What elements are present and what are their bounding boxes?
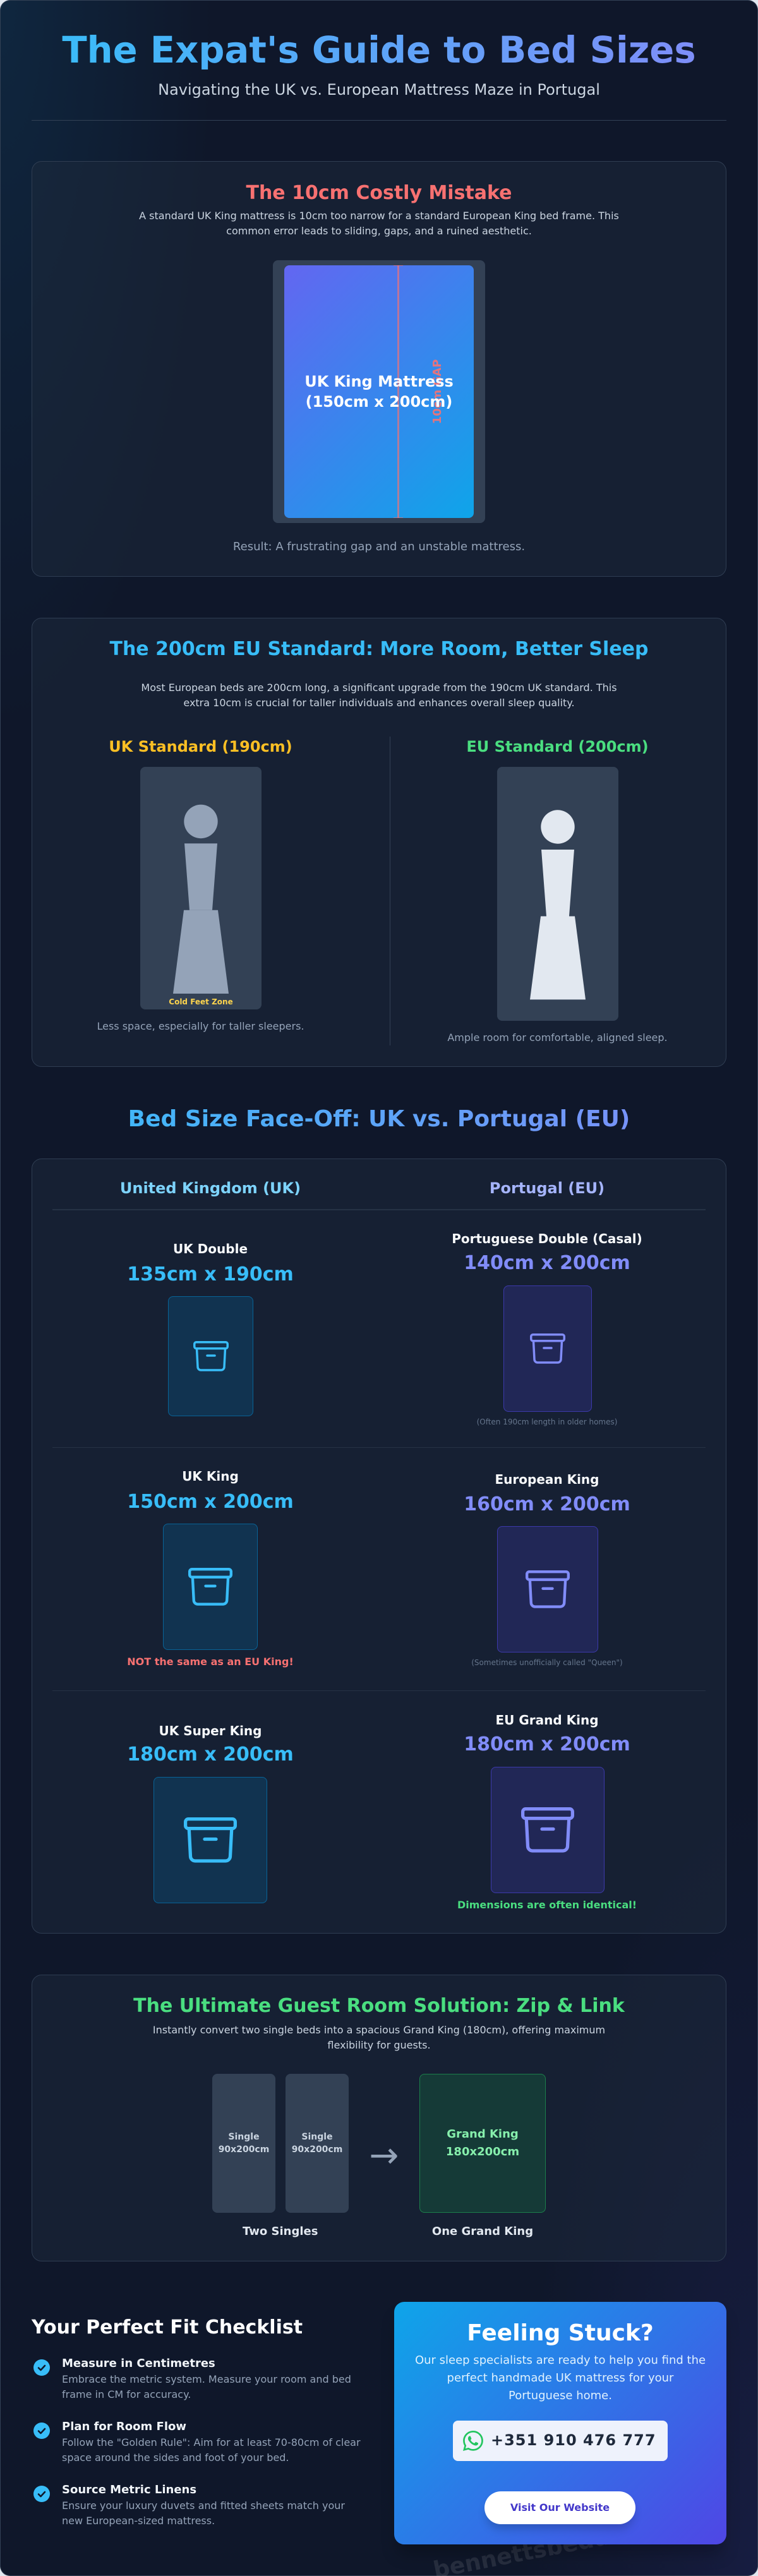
panel: zip and link <box>32 1975 726 2261</box>
icon: storage box <box>184 1817 237 1863</box>
text: EU standard explanation: extra 10cm is crucial for taller individuals and enhances overall sleep quality. <box>183 697 575 709</box>
bed label: grand king <box>446 2128 519 2158</box>
panel: call to action <box>394 2302 726 2544</box>
item text <box>62 2373 351 2400</box>
bed label: grand king: Grand King <box>447 2128 519 2141</box>
item text: Follow the "Golden Rule": Aim for at least 70-80cm of clear <box>62 2436 361 2448</box>
bed box: UK Super King <box>153 1777 267 1903</box>
size: EU Grand King: 180cm x 200cm <box>464 1733 630 1755</box>
heading: checklist: Your Perfect Fit Checklist <box>32 2316 303 2338</box>
phone box <box>453 2421 668 2461</box>
text: costly mistake explanation: common error leads to sliding, gaps, and a ruined aesthetic. <box>226 225 532 237</box>
panel: perfect fit checklist <box>32 2316 361 2527</box>
label: cold feet zone: Cold Feet Zone <box>169 997 233 1006</box>
item text <box>62 2436 361 2464</box>
phone number: +351 910 476 777 <box>491 2431 656 2449</box>
column head: UK: United Kingdom (UK) <box>120 1179 301 1197</box>
button: visit website <box>484 2491 635 2524</box>
checklist item: measure <box>33 2357 351 2400</box>
text: call to action: perfect handmade UK mattress for your <box>447 2371 673 2385</box>
label: EU Grand King: EU Grand King <box>495 1712 599 1728</box>
label: two singles: Two Singles <box>243 2225 318 2238</box>
mattress <box>284 265 474 518</box>
item title: Source Metric Linens <box>62 2483 196 2496</box>
label: UK Double: UK Double <box>173 1241 248 1256</box>
bed box: EU Grand King <box>490 1767 604 1893</box>
text: zip and link explanation: flexibility for guests. <box>327 2039 431 2051</box>
text: call to action <box>415 2354 706 2402</box>
diagram: UK bed with sleeper <box>140 767 262 1009</box>
bed: single two: Single <box>301 2132 333 2142</box>
arrow: → <box>370 2135 399 2176</box>
text: costly mistake explanation <box>139 210 619 237</box>
text: call to action: Portuguese home. <box>508 2389 612 2402</box>
size: UK Super King: 180cm x 200cm <box>127 1743 294 1766</box>
label: Portuguese Double: Portuguese Double (Casal) <box>452 1231 642 1246</box>
note: UK King warning: NOT the same as an EU King! <box>127 1656 294 1668</box>
size: UK King: 150cm x 200cm <box>127 1491 294 1513</box>
note: European King: (Sometimes unofficially called "Queen") <box>471 1658 623 1667</box>
item text <box>62 2500 345 2527</box>
heading: costly mistake: The 10cm Costly Mistake <box>246 182 512 204</box>
label: UK Super King: UK Super King <box>159 1723 262 1738</box>
mattress label: UK King Mattress <box>304 373 454 390</box>
bed: single two <box>286 2074 349 2213</box>
icon: storage box <box>193 1341 229 1371</box>
heading: EU standard column: EU Standard (200cm) <box>466 738 649 755</box>
size: European King: 160cm x 200cm <box>464 1493 630 1515</box>
result caption: Result: A frustrating gap and an unstable mattress. <box>233 540 525 553</box>
bed: single one <box>212 2074 275 2213</box>
item title: Plan for Room Flow <box>62 2420 186 2433</box>
label: one grand king: One Grand King <box>432 2225 533 2238</box>
label: UK King: UK King <box>182 1469 239 1484</box>
button label: Visit Our Website <box>510 2501 610 2513</box>
item text: Ensure your luxury duvets and fitted sheets match your <box>62 2500 345 2512</box>
bed: grand king <box>419 2074 546 2213</box>
bed box: UK King <box>163 1524 258 1650</box>
bed label: grand king: 180x200cm <box>446 2145 519 2158</box>
title: The Expat's Guide to Bed Sizes <box>62 29 696 71</box>
gap label: 10cm GAP <box>431 359 444 424</box>
bed box: European King <box>496 1526 598 1652</box>
text: call to action: Our sleep specialists are ready to help you find the <box>415 2354 706 2367</box>
panel: the 200cm EU standard <box>32 618 726 1067</box>
text: EU standard explanation <box>141 682 617 709</box>
caption: EU: Ample room for comfortable, aligned sleep. <box>447 1032 668 1044</box>
bed: single one: 90x200cm <box>219 2145 269 2155</box>
note: Portuguese Double: (Often 190cm length in older homes) <box>477 1417 617 1426</box>
gap line <box>397 265 399 518</box>
panel: comparison table <box>32 1159 726 1934</box>
note: EU Grand King: Dimensions are often identical! <box>457 1899 637 1911</box>
icon: whatsapp <box>463 2431 483 2451</box>
bed: single two: 90x200cm <box>292 2145 342 2155</box>
text: zip and link explanation <box>153 2024 605 2051</box>
column head: Portugal: Portugal (EU) <box>490 1179 605 1197</box>
size: Portuguese Double: 140cm x 200cm <box>464 1252 630 1274</box>
item title: Measure in Centimetres <box>62 2357 215 2370</box>
item text: new European-sized mattress. <box>62 2515 215 2527</box>
icon: storage box <box>521 1807 574 1853</box>
panel: the 10cm costly mistake <box>32 161 726 577</box>
mattress label <box>304 373 454 411</box>
bed box: UK Double <box>168 1296 253 1416</box>
mattress label: (150cm x 200cm) <box>306 393 452 411</box>
icon: check <box>33 2486 50 2502</box>
item text: frame in CM for accuracy. <box>62 2388 191 2400</box>
text: zip and link explanation: Instantly convert two single beds into a spacious Grand King (180cm), offering maximum <box>153 2024 605 2036</box>
icon: storage box <box>188 1568 232 1606</box>
checklist item: room flow <box>33 2420 361 2464</box>
item text: Embrace the metric system. Measure your room and bed <box>62 2373 351 2385</box>
diagram: EU bed with sleeper <box>496 767 618 1021</box>
checklist item: linens <box>33 2483 345 2527</box>
subtitle: Navigating the UK vs. European Mattress Maze in Portugal <box>158 81 600 99</box>
bed: single one: Single <box>228 2132 260 2142</box>
heading: EU standard: The 200cm EU Standard: More Room, Better Sleep <box>109 638 648 660</box>
icon: storage box <box>530 1333 565 1364</box>
bed box: Portuguese Double <box>503 1285 591 1412</box>
icon: storage box <box>526 1570 570 1608</box>
caption: UK: Less space, especially for taller sleepers. <box>97 1020 304 1032</box>
size: UK Double: 135cm x 190cm <box>127 1263 294 1285</box>
figure: sleeper EU <box>530 810 586 999</box>
icon: check <box>33 2423 50 2439</box>
icon: check <box>33 2359 50 2376</box>
heading: UK standard: UK Standard (190cm) <box>109 738 292 755</box>
heading: bed size face-off: Bed Size Face-Off: UK vs. Portugal (EU) <box>128 1106 630 1132</box>
item text: space around the sides and foot of your bed. <box>62 2452 289 2464</box>
label: European King: European King <box>495 1472 599 1487</box>
figure: sleeper UK <box>173 805 229 994</box>
text: costly mistake explanation: A standard UK King mattress is 10cm too narrow for a standard European King bed frame. This <box>139 210 619 222</box>
heading: zip and link: The Ultimate Guest Room Solution: Zip & Link <box>133 1995 625 2017</box>
heading: feeling stuck: Feeling Stuck? <box>467 2320 654 2346</box>
text: EU standard explanation: Most European beds are 200cm long, a significant upgrade from the 190cm UK standard. This <box>141 682 617 694</box>
diagram: bed frame with UK King mattress <box>273 260 485 523</box>
